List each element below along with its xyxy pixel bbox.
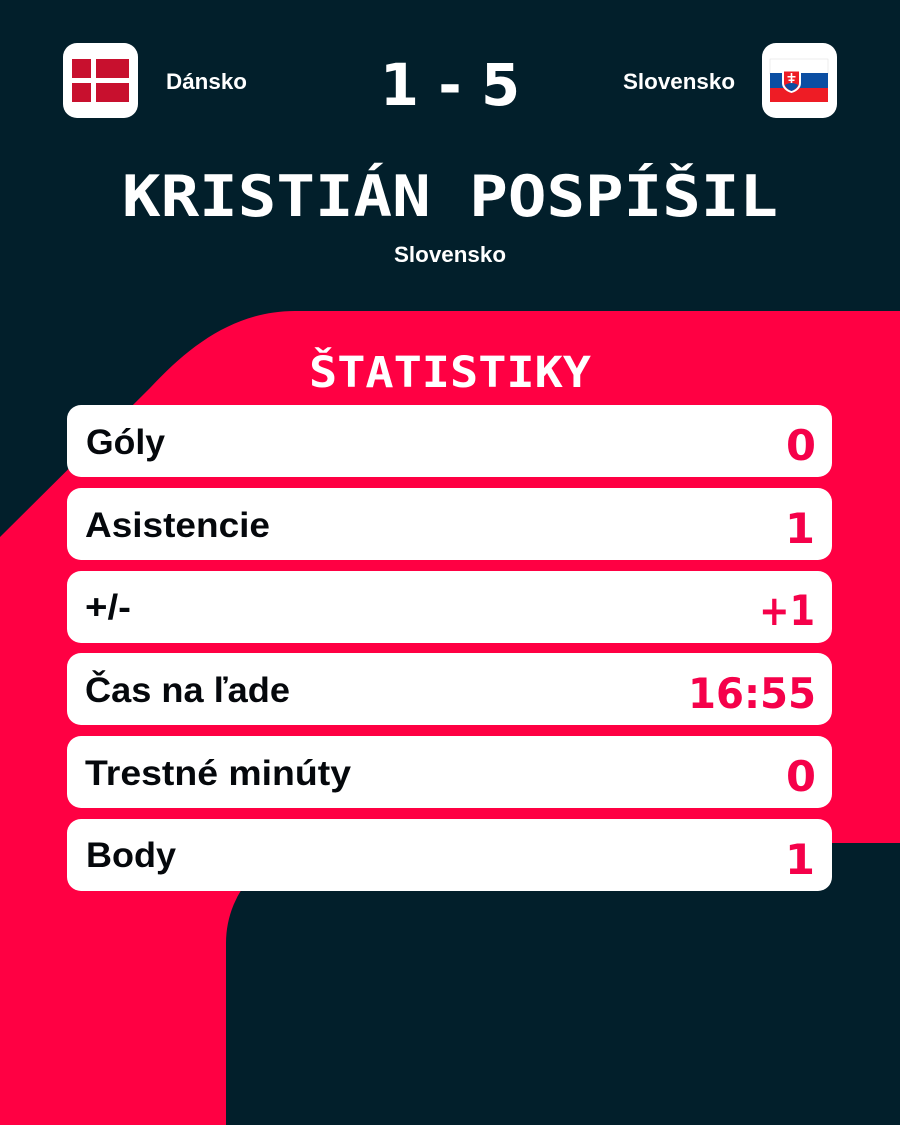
row: points: Body xyxy=(86,836,177,875)
row: points: 1 xyxy=(785,835,815,884)
row: plus minus: +1 xyxy=(759,586,815,635)
header: home team xyxy=(63,43,247,118)
row: time on ice: 16:55 xyxy=(688,669,816,718)
away team name: Slovensko xyxy=(623,69,735,94)
row: goals xyxy=(67,405,832,477)
row: points xyxy=(67,819,832,891)
section heading: ŠTATISTIKY xyxy=(309,347,591,398)
icon: Denmark flag xyxy=(63,43,138,118)
score: 1 - 5 xyxy=(380,51,520,119)
row: plus minus: +/- xyxy=(85,588,131,627)
stats table xyxy=(67,405,832,891)
row: assists xyxy=(67,488,832,560)
row: time on ice xyxy=(67,653,832,725)
row: assists: Asistencie xyxy=(85,506,270,545)
header: away team xyxy=(623,43,837,118)
player team: Slovensko xyxy=(394,242,506,267)
red background shape xyxy=(0,311,900,1125)
home team name: Dánsko xyxy=(166,69,247,94)
row: time on ice: Čas na ľade xyxy=(85,670,290,710)
row: penalty minutes xyxy=(67,736,832,808)
row: goals: 0 xyxy=(786,421,816,470)
row: plus minus xyxy=(67,571,832,643)
row: assists: 1 xyxy=(785,504,815,553)
row: penalty minutes: Trestné minúty xyxy=(85,754,352,793)
player name: KRISTIÁN POSPÍŠIL xyxy=(122,162,778,230)
icon: Slovakia flag xyxy=(762,43,837,118)
row: penalty minutes: 0 xyxy=(786,752,816,801)
row: goals: Góly xyxy=(86,423,166,462)
